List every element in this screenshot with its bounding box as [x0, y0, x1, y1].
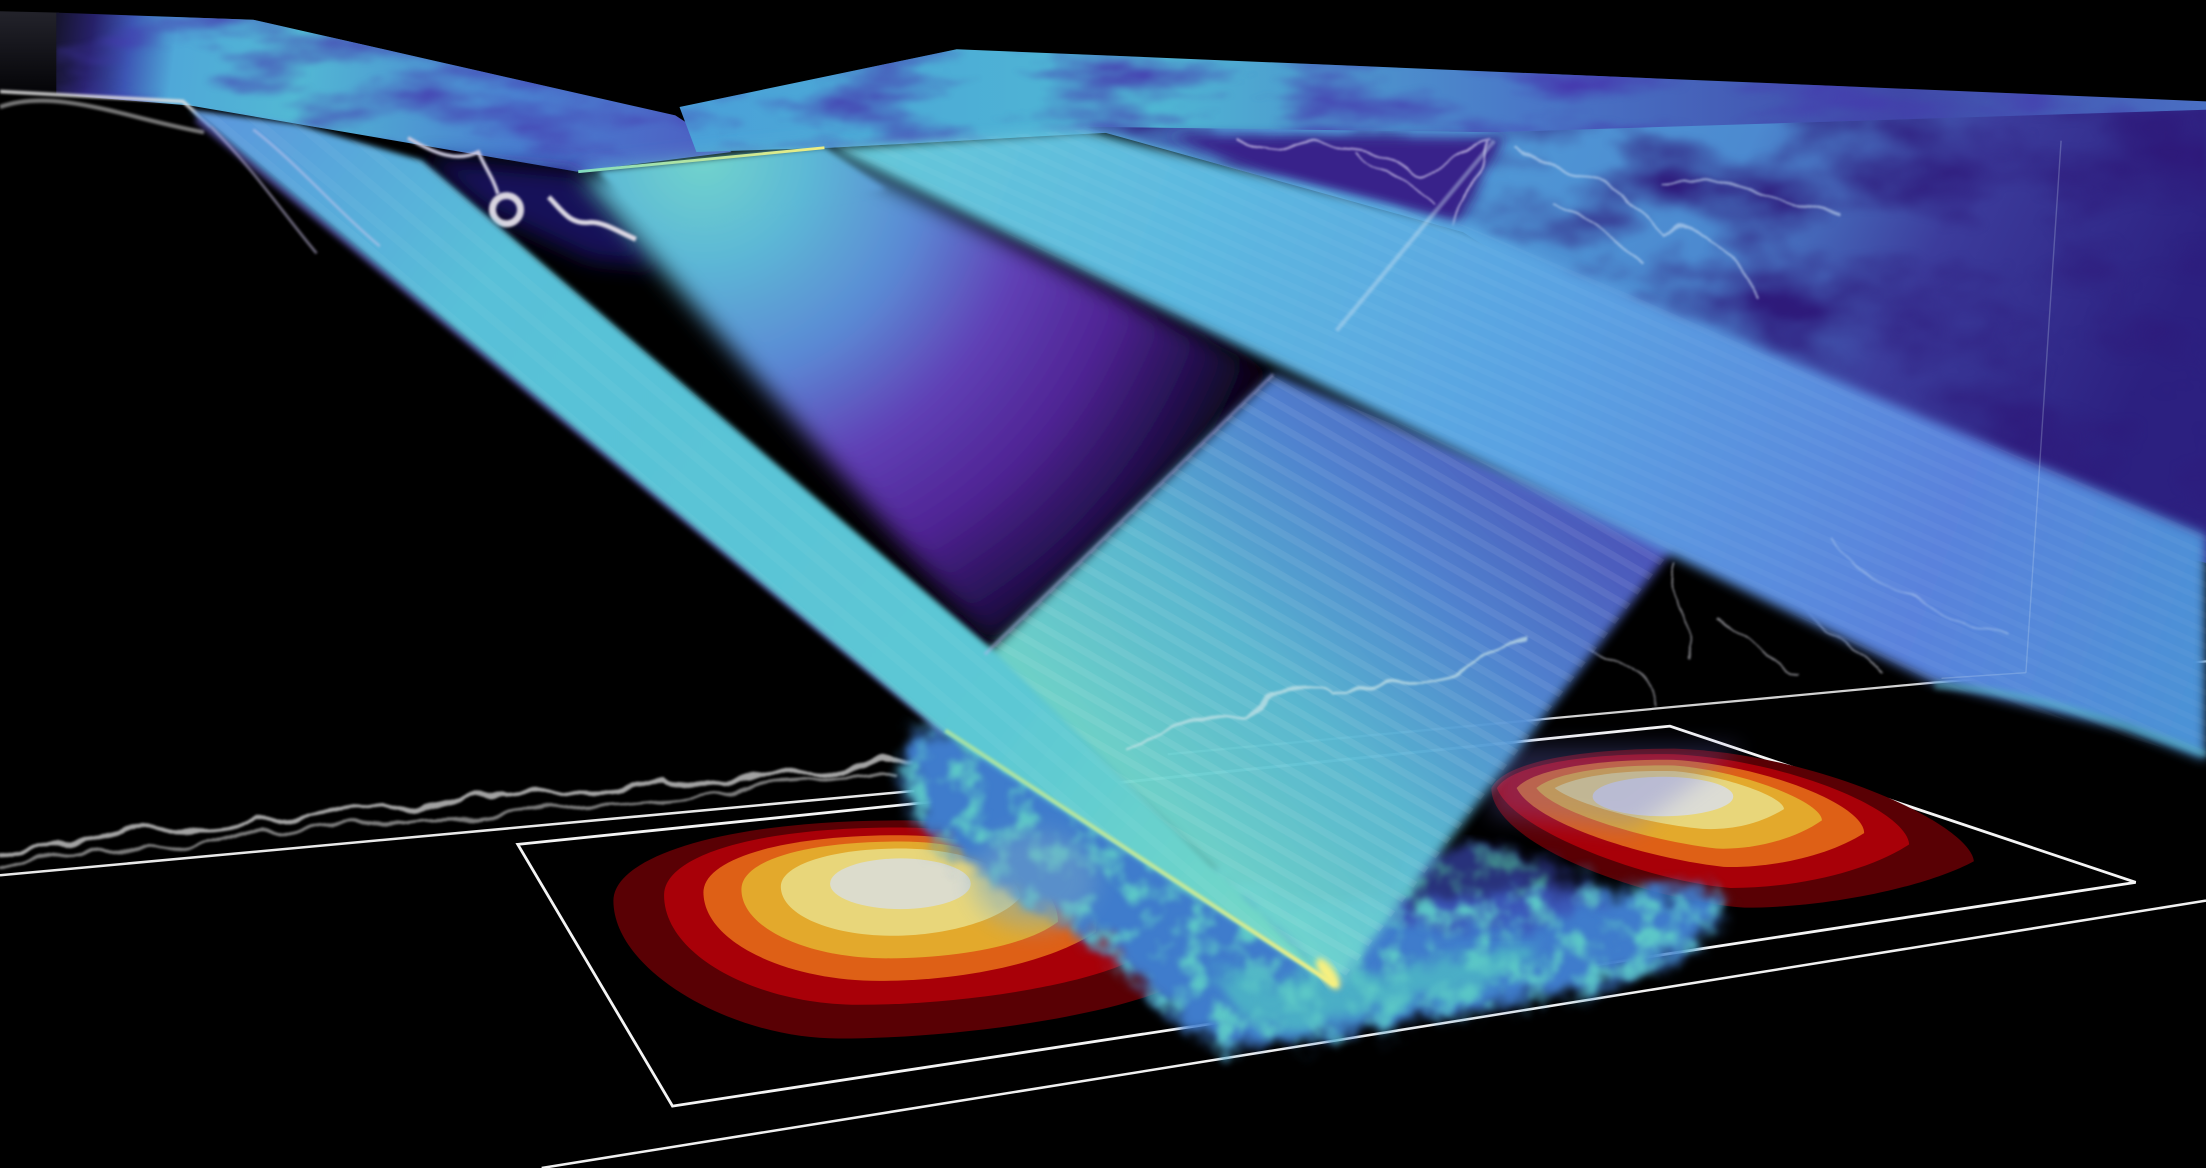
back panel filaments: [1111, 148, 1843, 303]
lower right dark zone filaments: [1590, 563, 1885, 704]
heat map: right footprint: [1491, 746, 1974, 908]
vortex filaments near fan corner: [408, 138, 636, 239]
cloud haze over left heat map: [971, 830, 1097, 929]
lower striped fan sheet: [982, 374, 1677, 988]
left wall top line: [0, 91, 211, 132]
back panel with blotchy purple field: [1083, 110, 2206, 563]
sheet tip highlight: [1312, 955, 1344, 993]
fan filaments: [1126, 640, 1526, 746]
heat map frame: [518, 726, 2136, 1106]
turbulent cloud at sheet base: [900, 730, 1724, 1048]
floor edge line: [542, 901, 2206, 1168]
sheet bright ridge: [945, 730, 1335, 985]
dark glow between sheets: [422, 158, 661, 267]
fan top bright edge: [578, 148, 824, 172]
sheet lower fringe: [1934, 685, 2206, 754]
upper right sheet: [830, 129, 2206, 760]
sheet left fringe: [197, 118, 945, 732]
left upper wall: [56, 13, 732, 172]
left wall base with turbulent filaments: [0, 759, 914, 875]
sheet upper filaments: [211, 127, 380, 253]
sheet crossing lines: [1337, 141, 2061, 678]
right upper wall: [680, 49, 2206, 155]
back floor line: [1168, 661, 2206, 754]
heat map: left footprint: [613, 820, 1178, 1039]
dark purple patch with bright filaments: [1168, 135, 1503, 225]
sheet streaks: [190, 110, 1337, 988]
purple fan sheet: [578, 148, 1273, 647]
left dark wall corner: [0, 11, 59, 94]
left descending sheet: [190, 110, 1344, 993]
fan edge seam: [985, 374, 1273, 654]
